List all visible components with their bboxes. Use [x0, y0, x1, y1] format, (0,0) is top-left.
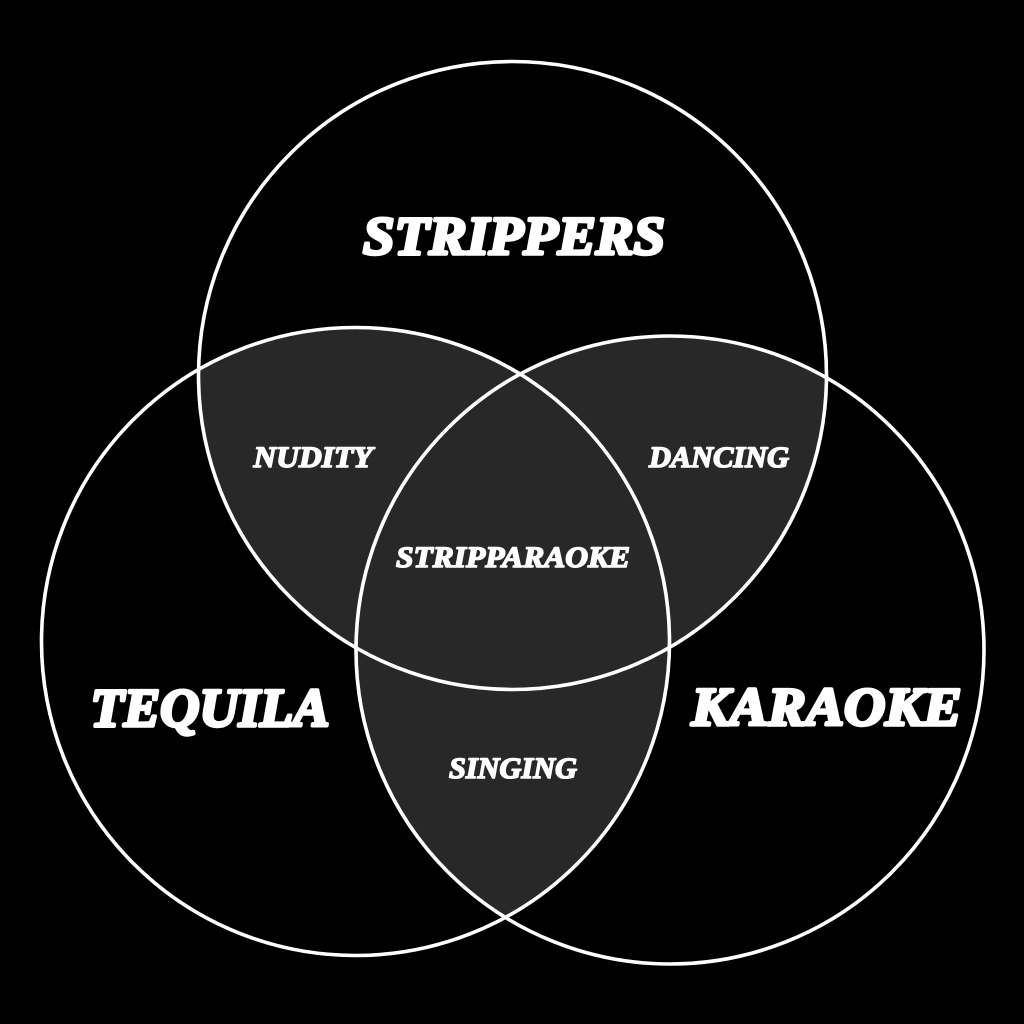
circle: strippers: [198, 62, 826, 690]
label: singing: SINGING: [449, 752, 577, 785]
overlap: strippers and karaoke: [524, 338, 825, 644]
circle: tequila: [42, 328, 670, 956]
label: karaoke: KARAOKE: [690, 677, 962, 737]
label: tequila: TEQUILA: [90, 678, 330, 738]
overlap: tequila and karaoke: [358, 650, 668, 916]
overlap: strippers and tequila: [200, 329, 516, 644]
label: dancing: DANCING: [648, 441, 789, 474]
label: stripparaoke: STRIPPARAOKE: [396, 541, 630, 574]
circle: karaoke: [356, 336, 984, 964]
label: nudity: NUDITY: [252, 441, 375, 474]
label: strippers: STRIPPERS: [363, 206, 665, 266]
